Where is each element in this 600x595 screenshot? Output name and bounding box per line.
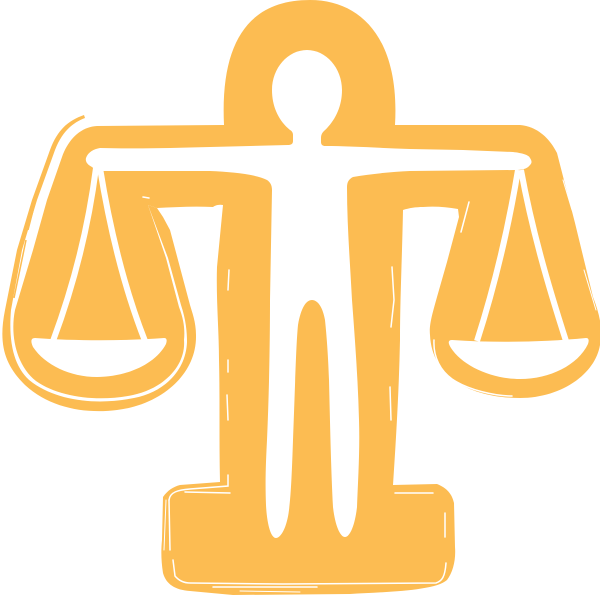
right pan strings: [477, 170, 566, 341]
left scale pan: [31, 168, 167, 377]
left pan bowl: [31, 338, 167, 377]
white brush flecks: [143, 180, 596, 592]
white figure body and arms: [86, 50, 532, 538]
right pan bowl: [449, 338, 589, 379]
right scale pan: [449, 170, 589, 379]
brush stroke band around left pan: [2, 115, 196, 411]
left pan strings: [53, 168, 145, 341]
orange flecks in left gap: [14, 175, 42, 298]
